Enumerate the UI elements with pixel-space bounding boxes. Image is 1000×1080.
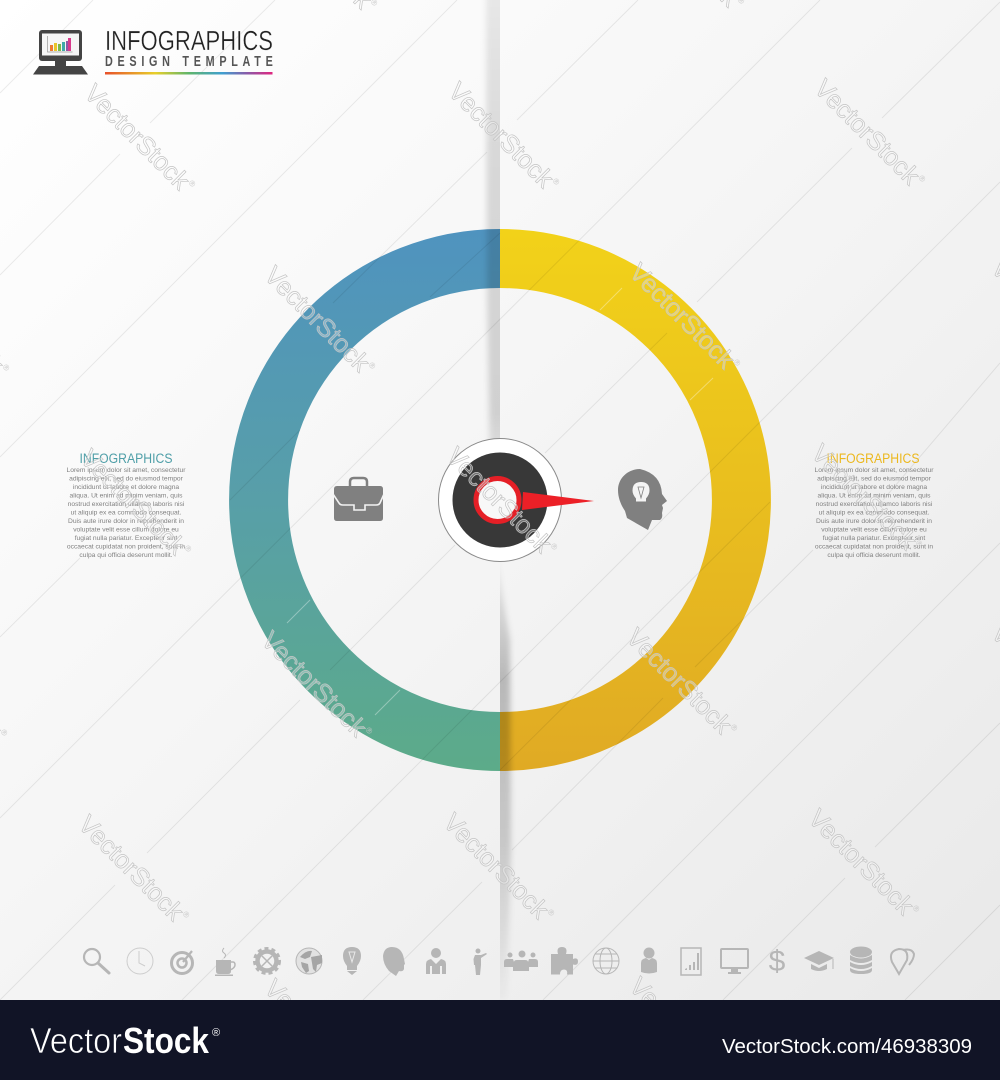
icon: graduation cap xyxy=(804,951,834,971)
icon: wire globe xyxy=(593,948,619,974)
icon: monitor with bar chart xyxy=(33,30,88,74)
left body text: culpa qui officia deserunt mollit. xyxy=(79,552,173,559)
header subtitle: DESIGN TEMPLATE xyxy=(105,52,273,69)
footer bar xyxy=(0,1000,1000,1080)
right body text: ut aliquip ex ea commodo consequat. xyxy=(819,510,930,516)
ring chart xyxy=(259,258,741,742)
right heading: INFOGRAPHICS xyxy=(826,451,920,466)
footer logo: Stock xyxy=(123,1020,210,1061)
left body text: fugiat nulla pariatur. Excepteur sint xyxy=(75,535,177,542)
icon: map pins xyxy=(891,949,914,974)
footer logo: ® xyxy=(212,1027,220,1039)
left body text: occaecat cupidatat non proident, sunt in xyxy=(67,544,185,550)
footer logo: Vector xyxy=(30,1020,122,1061)
left text block xyxy=(67,451,186,559)
icon: head xyxy=(383,947,405,976)
right body text: adipiscing elit, sed do eiusmod tempor xyxy=(817,476,932,482)
right text block xyxy=(815,451,934,559)
right body text: incididunt ut labore et dolore magna xyxy=(821,484,927,491)
icon: business person xyxy=(426,948,446,974)
left body text: adipiscing elit, sed do eiusmod tempor xyxy=(69,476,184,482)
right body text xyxy=(815,467,934,559)
header logo xyxy=(33,25,273,74)
icon: coin stack xyxy=(850,946,872,974)
right body text: fugiat nulla pariatur. Excepteur sint xyxy=(823,535,925,542)
right body text: culpa qui officia deserunt mollit. xyxy=(827,552,921,559)
icon: tablet chart xyxy=(681,948,701,975)
left body text: nostrud exercitation ullamco laboris nisi xyxy=(68,501,185,508)
bottom icon row xyxy=(84,945,914,978)
icon: coffee cup xyxy=(215,948,235,976)
center fold shadow xyxy=(486,0,511,1000)
header title: INFOGRAPHICS xyxy=(105,25,273,56)
right body text: voluptate velit esse cillum dolore eu xyxy=(821,526,927,534)
icon: puzzle piece xyxy=(551,947,578,974)
icon: briefcase xyxy=(333,478,384,521)
left body text: Lorem ipsum dolor sit amet, consectetur xyxy=(67,467,186,474)
icon: globe xyxy=(296,948,322,974)
left body text: ut aliquip ex ea commodo consequat. xyxy=(71,510,182,516)
ring segment: blue-green left half xyxy=(259,258,500,742)
red hub xyxy=(476,478,519,522)
right body text: occaecat cupidatat non proident, sunt in xyxy=(815,544,933,550)
icon: dollar sign: $ xyxy=(769,945,786,978)
left body text: aliqua. Ut enim ad minim veniam, quis xyxy=(70,492,183,500)
footer logo xyxy=(30,1020,220,1061)
right body text: Lorem ipsum dolor sit amet, consectetur xyxy=(815,467,934,474)
icon: gear xyxy=(254,948,280,974)
dial dark disc xyxy=(452,452,548,548)
ring segment: yellow right half xyxy=(500,258,741,742)
right body text: aliqua. Ut enim ad minim veniam, quis xyxy=(818,492,931,500)
icon: group of people xyxy=(504,950,538,971)
center dial with needle xyxy=(438,438,594,562)
icon: magnifier xyxy=(84,949,109,973)
right body text: nostrud exercitation ullamco laboris nisi xyxy=(816,501,933,508)
left body text: Duis aute irure dolor in reprehenderit in xyxy=(68,518,184,525)
left body text xyxy=(67,467,186,559)
rainbow bar xyxy=(105,72,272,74)
icon: target xyxy=(172,951,192,974)
right body text: Duis aute irure dolor in reprehenderit in xyxy=(816,518,932,525)
left body text: incididunt ut labore et dolore magna xyxy=(73,484,179,491)
icon: desktop monitor xyxy=(721,949,748,974)
footer image id: VectorStock.com/46938309 xyxy=(722,1035,972,1058)
left body text: voluptate velit esse cillum dolore eu xyxy=(73,526,179,534)
icon: head with lightbulb xyxy=(618,469,667,530)
icon: light bulb xyxy=(343,947,361,975)
red needle xyxy=(522,492,594,510)
icon: clock xyxy=(127,948,153,974)
icon: presenter xyxy=(474,948,487,975)
icon: user xyxy=(641,948,657,974)
dial outer ring xyxy=(438,438,562,562)
left heading: INFOGRAPHICS xyxy=(80,451,172,466)
